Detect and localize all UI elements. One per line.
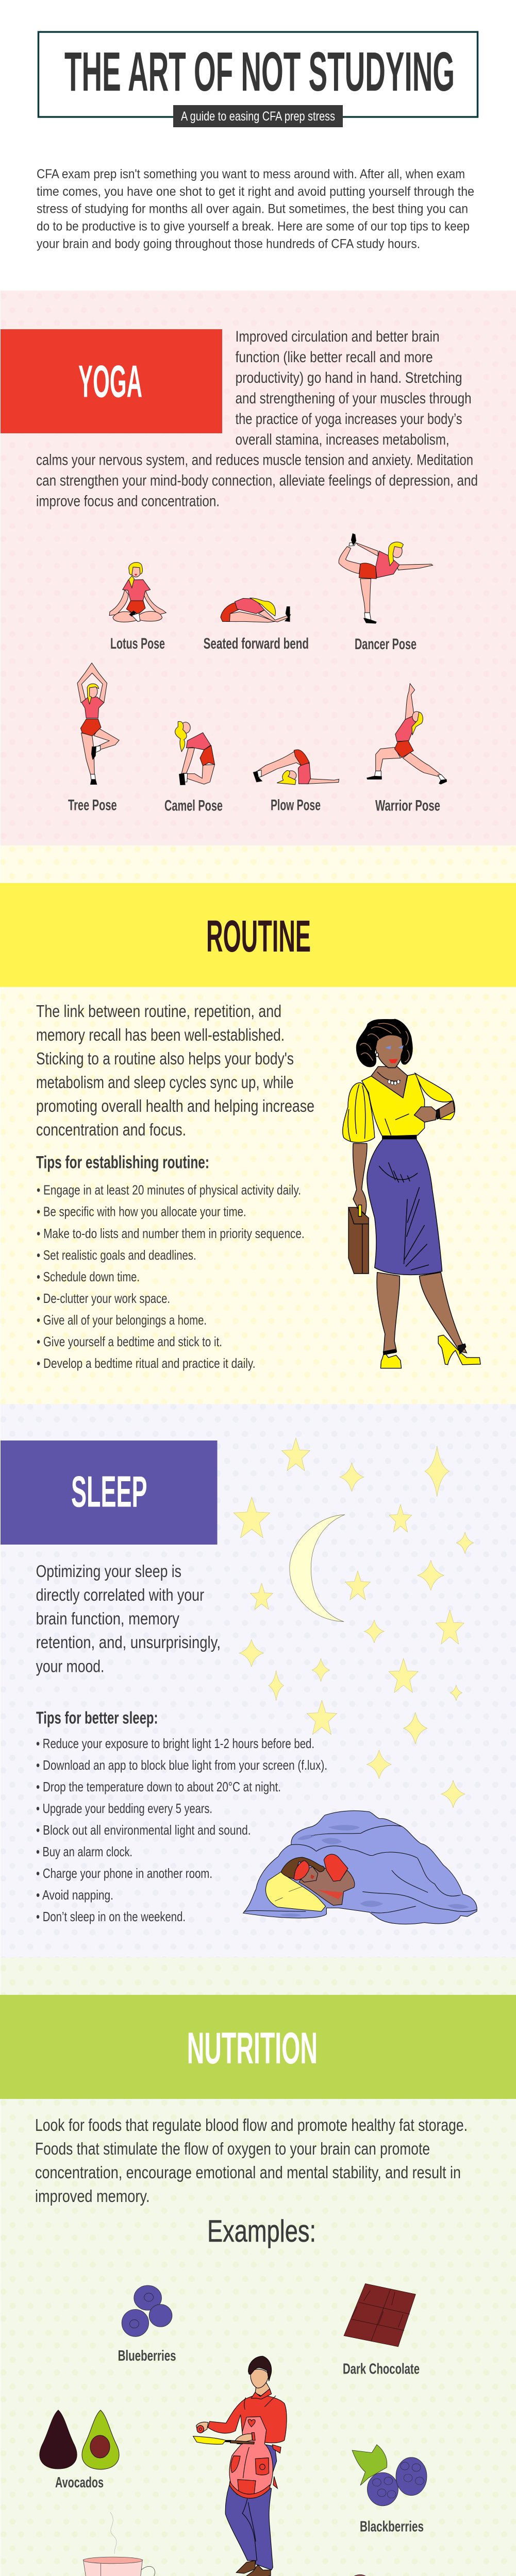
routine tips heading: Tips for establishing routine:	[36, 1153, 209, 1173]
sleep tips list: • Drop the temperature down to about 20°C at night.	[36, 1779, 281, 1794]
routine tips list: • Set realistic goals and deadlines.	[37, 1247, 196, 1263]
routine tips list	[37, 1182, 305, 1371]
routine text: promoting overall health and helping increase	[36, 1096, 314, 1115]
pose labels	[68, 635, 440, 814]
sleep heading	[1, 1440, 218, 1545]
panel: sleep	[1, 1404, 516, 1958]
icon: dark chocolate	[344, 2284, 415, 2347]
illustration: moon and stars	[234, 1438, 474, 1808]
routine heading: ROUTINE	[206, 911, 311, 961]
figure: chef with frying pan	[193, 2356, 287, 2576]
figure: camel pose	[175, 721, 214, 785]
yoga text: Improved circulation and better brain	[236, 328, 440, 345]
sleep heading: SLEEP	[71, 1468, 147, 1517]
yoga figures: top row and camel, plow, warrior	[109, 534, 447, 785]
pose labels: Camel Pose	[164, 798, 223, 814]
food labels: Dark Chocolate	[343, 2361, 420, 2378]
routine text: concentration and focus.	[36, 1120, 186, 1139]
intro text: your brain and body going throughout those hundreds of CFA study hours.	[37, 237, 420, 251]
pose labels: Warrior Pose	[375, 798, 440, 814]
food labels: Blackberries	[360, 2518, 424, 2535]
nutrition text	[35, 2115, 468, 2206]
routine text	[36, 1002, 314, 1139]
yoga text: overall stamina, increases metabolism,	[236, 431, 450, 448]
nutrition text: Foods that stimulate the flow of oxygen to your brain can promote	[35, 2139, 430, 2158]
sleep text	[36, 1562, 221, 1675]
intro text	[37, 167, 474, 251]
yoga text: function (like better recall and more	[236, 349, 433, 366]
routine tips list: • Be specific with how you allocate your time.	[37, 1204, 246, 1219]
figure: tree pose	[77, 663, 119, 784]
sleep tips list: • Charge your phone in another room.	[36, 1866, 212, 1881]
food labels	[55, 2348, 424, 2576]
sleep tips heading: Tips for better sleep:	[36, 1708, 158, 1727]
sleep text: directly correlated with your	[36, 1585, 204, 1604]
pose labels: Seated forward bend	[204, 635, 309, 652]
subtitle badge	[173, 105, 343, 127]
yoga heading	[1, 329, 222, 433]
title frame	[38, 32, 477, 117]
header: title block	[38, 32, 477, 127]
figure: dancer pose	[339, 534, 432, 623]
routine text: metabolism and sleep cycles sync up, while	[36, 1073, 294, 1092]
icon: green tea cup	[68, 2512, 158, 2576]
icon: blueberries	[122, 2285, 172, 2336]
icon: blackberries	[352, 2445, 427, 2506]
figure: seated forward bend	[221, 598, 290, 622]
intro text: stress of studying for months all over again. But sometimes, the best thing you can	[37, 202, 468, 216]
panel: yoga	[1, 291, 516, 845]
figure: woman checking watch with briefcase	[343, 1019, 480, 1368]
subtitle badge: A guide to easing CFA prep stress	[181, 109, 335, 124]
sleep tips list: • Buy an alarm clock.	[36, 1844, 132, 1859]
panel: routine	[0, 845, 516, 1404]
pose labels: Dancer Pose	[355, 636, 417, 653]
routine tips list: • Engage in at least 20 minutes of physical activity daily.	[37, 1182, 301, 1197]
routine tips list: • Give yourself a bedtime and stick to it.	[37, 1334, 222, 1349]
nutrition heading: NUTRITION	[187, 2024, 318, 2073]
sleep tips list	[36, 1736, 327, 1924]
yoga text: improve focus and concentration.	[36, 493, 220, 510]
icon: nuts	[326, 2571, 407, 2576]
sleep tips list: • Download an app to block blue light from your screen (f.lux).	[36, 1757, 327, 1773]
routine heading	[0, 883, 516, 987]
routine text: Sticking to a routine also helps your body's	[36, 1049, 294, 1068]
sleep tips list: • Reduce your exposure to bright light 1-2 hours before bed.	[36, 1736, 314, 1751]
routine tips list: • Make to-do lists and number them in priority sequence.	[37, 1226, 305, 1241]
figure: warrior pose	[367, 684, 447, 784]
nutrition text: improved memory.	[35, 2187, 149, 2206]
sleep text: brain function, memory	[36, 1609, 179, 1628]
panel: nutrition	[0, 1958, 516, 2576]
pose labels: Plow Pose	[271, 796, 321, 814]
figure: lotus pose	[109, 562, 166, 622]
pose labels: Tree Pose	[68, 796, 117, 814]
sleep tips list: • Upgrade your bedding every 5 years.	[36, 1801, 212, 1816]
food labels: Avocados	[55, 2475, 104, 2491]
sleep tips list: • Don’t sleep in on the weekend.	[36, 1909, 186, 1924]
sleep text: your mood.	[36, 1657, 104, 1675]
yoga heading: YOGA	[78, 355, 142, 407]
routine tips list: • Schedule down time.	[37, 1269, 140, 1284]
examples heading: Examples:	[207, 2214, 316, 2248]
intro text: time comes, you have one shot to get it right and avoid putting yourself through the	[37, 184, 474, 199]
yoga text: productivity) go hand in hand. Stretching	[236, 369, 462, 386]
figure: sleeper under blanket	[243, 1811, 477, 1924]
intro text: do to be productive is to give yourself a break. Here are some of our top tips to keep	[37, 219, 470, 234]
intro text: CFA exam prep isn't something you want to mess around with. After all, when exam	[37, 167, 465, 181]
sleep tips list: • Block out all environmental light and sound.	[36, 1822, 251, 1838]
icons: stars	[234, 1438, 474, 1808]
yoga text: the practice of yoga increases your body’s	[236, 411, 462, 428]
sleep tips list: • Avoid napping.	[36, 1887, 113, 1903]
nutrition heading	[0, 1995, 516, 2099]
icon: crescent moon	[290, 1515, 345, 1622]
icon: avocados	[40, 2410, 119, 2469]
sleep text: retention, and, unsurprisingly,	[36, 1633, 221, 1652]
yoga text	[36, 328, 478, 510]
routine tips list: • De-clutter your work space.	[37, 1291, 170, 1306]
routine tips list: • Give all of your belongings a home.	[37, 1312, 207, 1328]
food labels: Blueberries	[118, 2348, 176, 2364]
pose labels: Lotus Pose	[110, 635, 165, 652]
routine tips list: • Develop a bedtime ritual and practice it daily.	[37, 1355, 256, 1371]
routine text: The link between routine, repetition, and	[36, 1002, 281, 1021]
routine text: memory recall has been well-established.	[36, 1025, 285, 1044]
sleep text: Optimizing your sleep is	[36, 1562, 181, 1581]
figure: plow pose	[253, 750, 339, 785]
